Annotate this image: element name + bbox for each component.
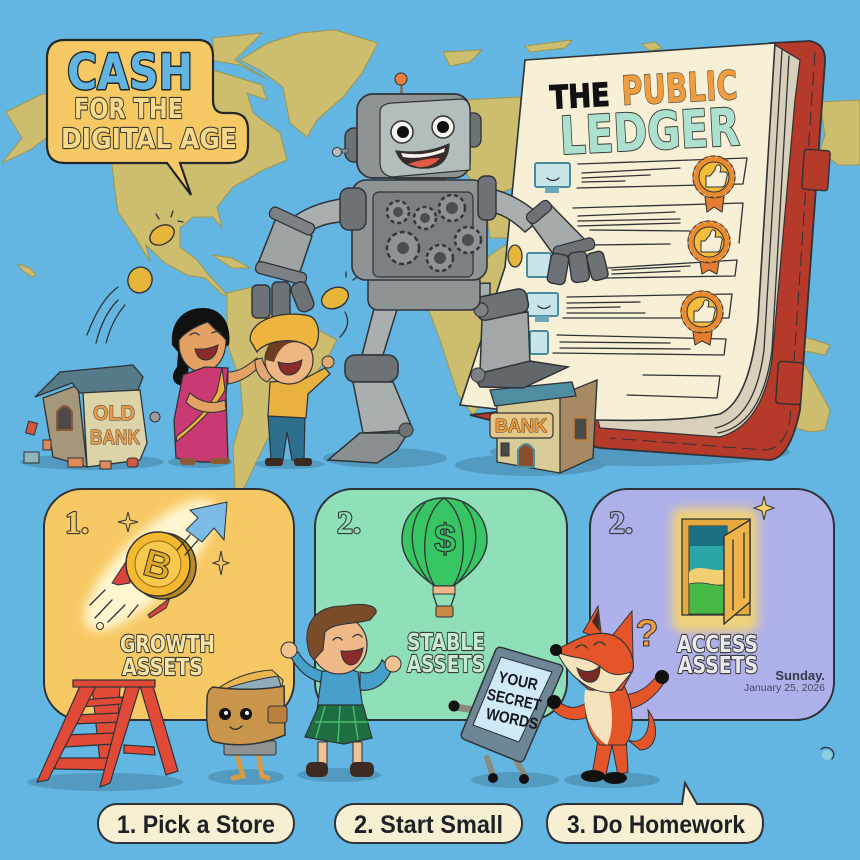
wallet eyes and smile	[219, 708, 252, 729]
robot chest gear panel	[373, 192, 481, 277]
step pill: do homework	[547, 783, 763, 843]
boy pants	[268, 415, 305, 460]
ledger rows	[553, 158, 747, 398]
boy in kilt	[281, 604, 401, 782]
map: Hawaii	[18, 264, 36, 277]
phone legs	[487, 758, 526, 778]
fox arms	[620, 672, 666, 710]
map: Middle East strip	[487, 213, 510, 238]
bank roof	[490, 382, 576, 406]
boy head	[265, 336, 313, 384]
map: Arctic islands	[443, 50, 482, 66]
date stamp: January 25, 2026	[744, 682, 825, 694]
date stamp: Sunday.	[775, 668, 825, 683]
map: South America	[227, 287, 337, 490]
number 1: 1.	[65, 504, 89, 540]
map: Novaya Zemlya	[642, 42, 662, 51]
ledger cover	[470, 41, 825, 460]
rubble	[24, 412, 160, 469]
wallet legs	[233, 752, 268, 778]
coin near robot hand	[318, 272, 357, 337]
fox head	[560, 633, 633, 690]
label: growth assets: GROWTH	[120, 632, 215, 658]
step pill: pick a store	[98, 804, 294, 843]
fox character	[547, 606, 669, 788]
step pill: pick a store: 1. Pick a Store	[117, 811, 275, 839]
fox legs	[592, 735, 628, 775]
old bank walls	[83, 390, 147, 467]
phone text	[484, 669, 543, 733]
wallet body	[207, 686, 285, 745]
robot torso	[352, 180, 487, 280]
kid smile	[341, 648, 363, 665]
robot	[252, 73, 609, 468]
fox tail	[628, 710, 656, 750]
panel: growth assets	[44, 482, 294, 720]
map: Europe and Asia	[463, 97, 525, 195]
robot shoulder	[340, 188, 366, 230]
map: East Asia	[820, 100, 860, 165]
robot left arm	[252, 197, 358, 320]
coins	[87, 211, 522, 343]
step pill: start small: 2. Start Small	[354, 811, 503, 839]
phone text: SECRET	[485, 687, 543, 715]
fox body	[585, 682, 632, 745]
old bank sign	[90, 402, 140, 449]
icon: bitcoin rocket coin	[67, 482, 233, 648]
icon: green hot air balloon	[402, 498, 487, 617]
boy hair	[266, 332, 309, 362]
woman hair	[172, 308, 229, 386]
label: stable assets	[407, 630, 485, 678]
thumbs-up badges	[681, 156, 735, 345]
map: Svalbard	[525, 40, 572, 52]
map: Indonesia	[795, 335, 830, 355]
step pill: do homework: 3. Do Homework	[567, 811, 745, 839]
fox feet	[581, 770, 605, 782]
red ladder	[27, 680, 183, 791]
label: access assets: ACCESS	[677, 632, 758, 658]
woman smile	[195, 345, 218, 360]
boy shirt	[268, 368, 330, 418]
boy smile	[278, 360, 302, 375]
old bank sign: BANK	[90, 427, 140, 449]
label: stable assets: STABLE	[407, 630, 485, 656]
kid hair	[307, 604, 376, 660]
phone character	[448, 652, 559, 788]
title line: for the: FOR THE	[74, 92, 183, 125]
robot right shoulder	[478, 176, 496, 220]
fox belly	[584, 688, 612, 745]
phone text: YOUR	[497, 669, 540, 694]
map: Greenland	[240, 30, 378, 137]
kid arms	[290, 652, 326, 682]
map: North America	[100, 33, 287, 297]
new bank: BANK	[495, 416, 547, 436]
world map	[2, 30, 860, 490]
old bank window	[57, 406, 72, 430]
phone screen	[473, 657, 552, 742]
label: growth assets: ASSETS	[122, 655, 203, 681]
phone body outline	[466, 652, 558, 757]
old bank roof	[35, 365, 143, 397]
robot antenna	[395, 73, 407, 98]
phone text: WORDS	[484, 706, 540, 733]
boy shoes	[265, 458, 283, 466]
woman sari	[174, 367, 228, 462]
map: Alaska	[2, 94, 50, 163]
boy hat	[250, 314, 318, 352]
kid hands	[281, 642, 297, 658]
wallet character	[207, 670, 287, 785]
ledger title: LEDGER	[558, 98, 741, 167]
title line: digital age: DIGITAL AGE	[61, 122, 237, 155]
title speech bubble	[47, 40, 248, 195]
coin on north america	[146, 211, 183, 249]
woman arm	[228, 358, 258, 384]
woman in sari	[168, 308, 258, 468]
monitor icons	[527, 163, 570, 354]
ledger title: THE	[549, 76, 611, 117]
ledger title: PUBLIC	[620, 63, 739, 115]
coin on ledger edge	[508, 245, 522, 267]
wallet shorts	[224, 741, 276, 755]
ledger book	[460, 41, 830, 466]
ledger shadow	[490, 438, 790, 466]
wallet papers	[216, 670, 283, 696]
ledger page	[460, 43, 775, 420]
robot left leg	[328, 297, 413, 463]
coin flying	[87, 264, 156, 343]
kid legs	[318, 742, 327, 766]
kid shoes	[306, 762, 328, 777]
cover strap top	[802, 149, 830, 191]
fox snout	[557, 652, 632, 692]
step pill: start small	[335, 804, 522, 843]
wallet clasp	[268, 706, 287, 723]
icon: open door	[672, 496, 774, 632]
kid hoodie	[317, 668, 363, 710]
fox smile	[577, 666, 600, 682]
bank window	[574, 418, 587, 440]
fox ears	[583, 606, 602, 640]
robot left hand	[252, 280, 316, 320]
new bank	[455, 380, 605, 476]
boy with hat	[250, 314, 334, 469]
cover strap bottom	[776, 361, 803, 405]
woman face	[179, 322, 226, 372]
old bank	[20, 365, 164, 470]
robot right arm	[487, 188, 609, 285]
date stamp	[744, 668, 825, 694]
kid kilt	[305, 705, 372, 744]
robot face	[380, 99, 470, 177]
woman feet	[180, 458, 196, 465]
label: access assets	[677, 632, 758, 679]
bank door	[518, 444, 534, 467]
number 2: 2.	[337, 504, 361, 540]
robot hips	[368, 272, 480, 310]
panel: access assets	[590, 489, 834, 720]
map: Africa	[425, 245, 520, 415]
robot head	[357, 94, 470, 178]
number 2 second: 2.	[609, 504, 633, 540]
label: stable assets: ASSETS	[407, 652, 485, 678]
question mark: ?	[635, 613, 659, 655]
bank sign	[490, 413, 553, 438]
robot right hand	[547, 250, 609, 285]
label: access assets: ASSETS	[678, 653, 758, 679]
phone arm left	[455, 707, 475, 710]
decorative swirl icon	[821, 747, 834, 760]
panel: stable assets	[315, 489, 567, 720]
robot foot shadow	[323, 448, 447, 468]
robot neck	[395, 172, 445, 188]
icon: green hot air balloon: $	[434, 517, 456, 561]
kid head	[311, 616, 367, 674]
robot ear	[332, 113, 481, 162]
ledger page edges	[595, 45, 800, 437]
icon: bitcoin rocket coin: B	[139, 542, 176, 590]
phone body	[466, 652, 558, 757]
map: Australia	[785, 360, 830, 432]
old bank sign: OLD	[93, 402, 135, 425]
label: growth assets	[120, 632, 215, 681]
ledger title	[548, 63, 741, 168]
map: Caribbean	[212, 255, 250, 268]
title word: cash: CASH	[67, 44, 193, 101]
boy arm and hand	[255, 358, 275, 382]
robot right leg	[447, 283, 568, 388]
bank walls	[497, 380, 597, 473]
